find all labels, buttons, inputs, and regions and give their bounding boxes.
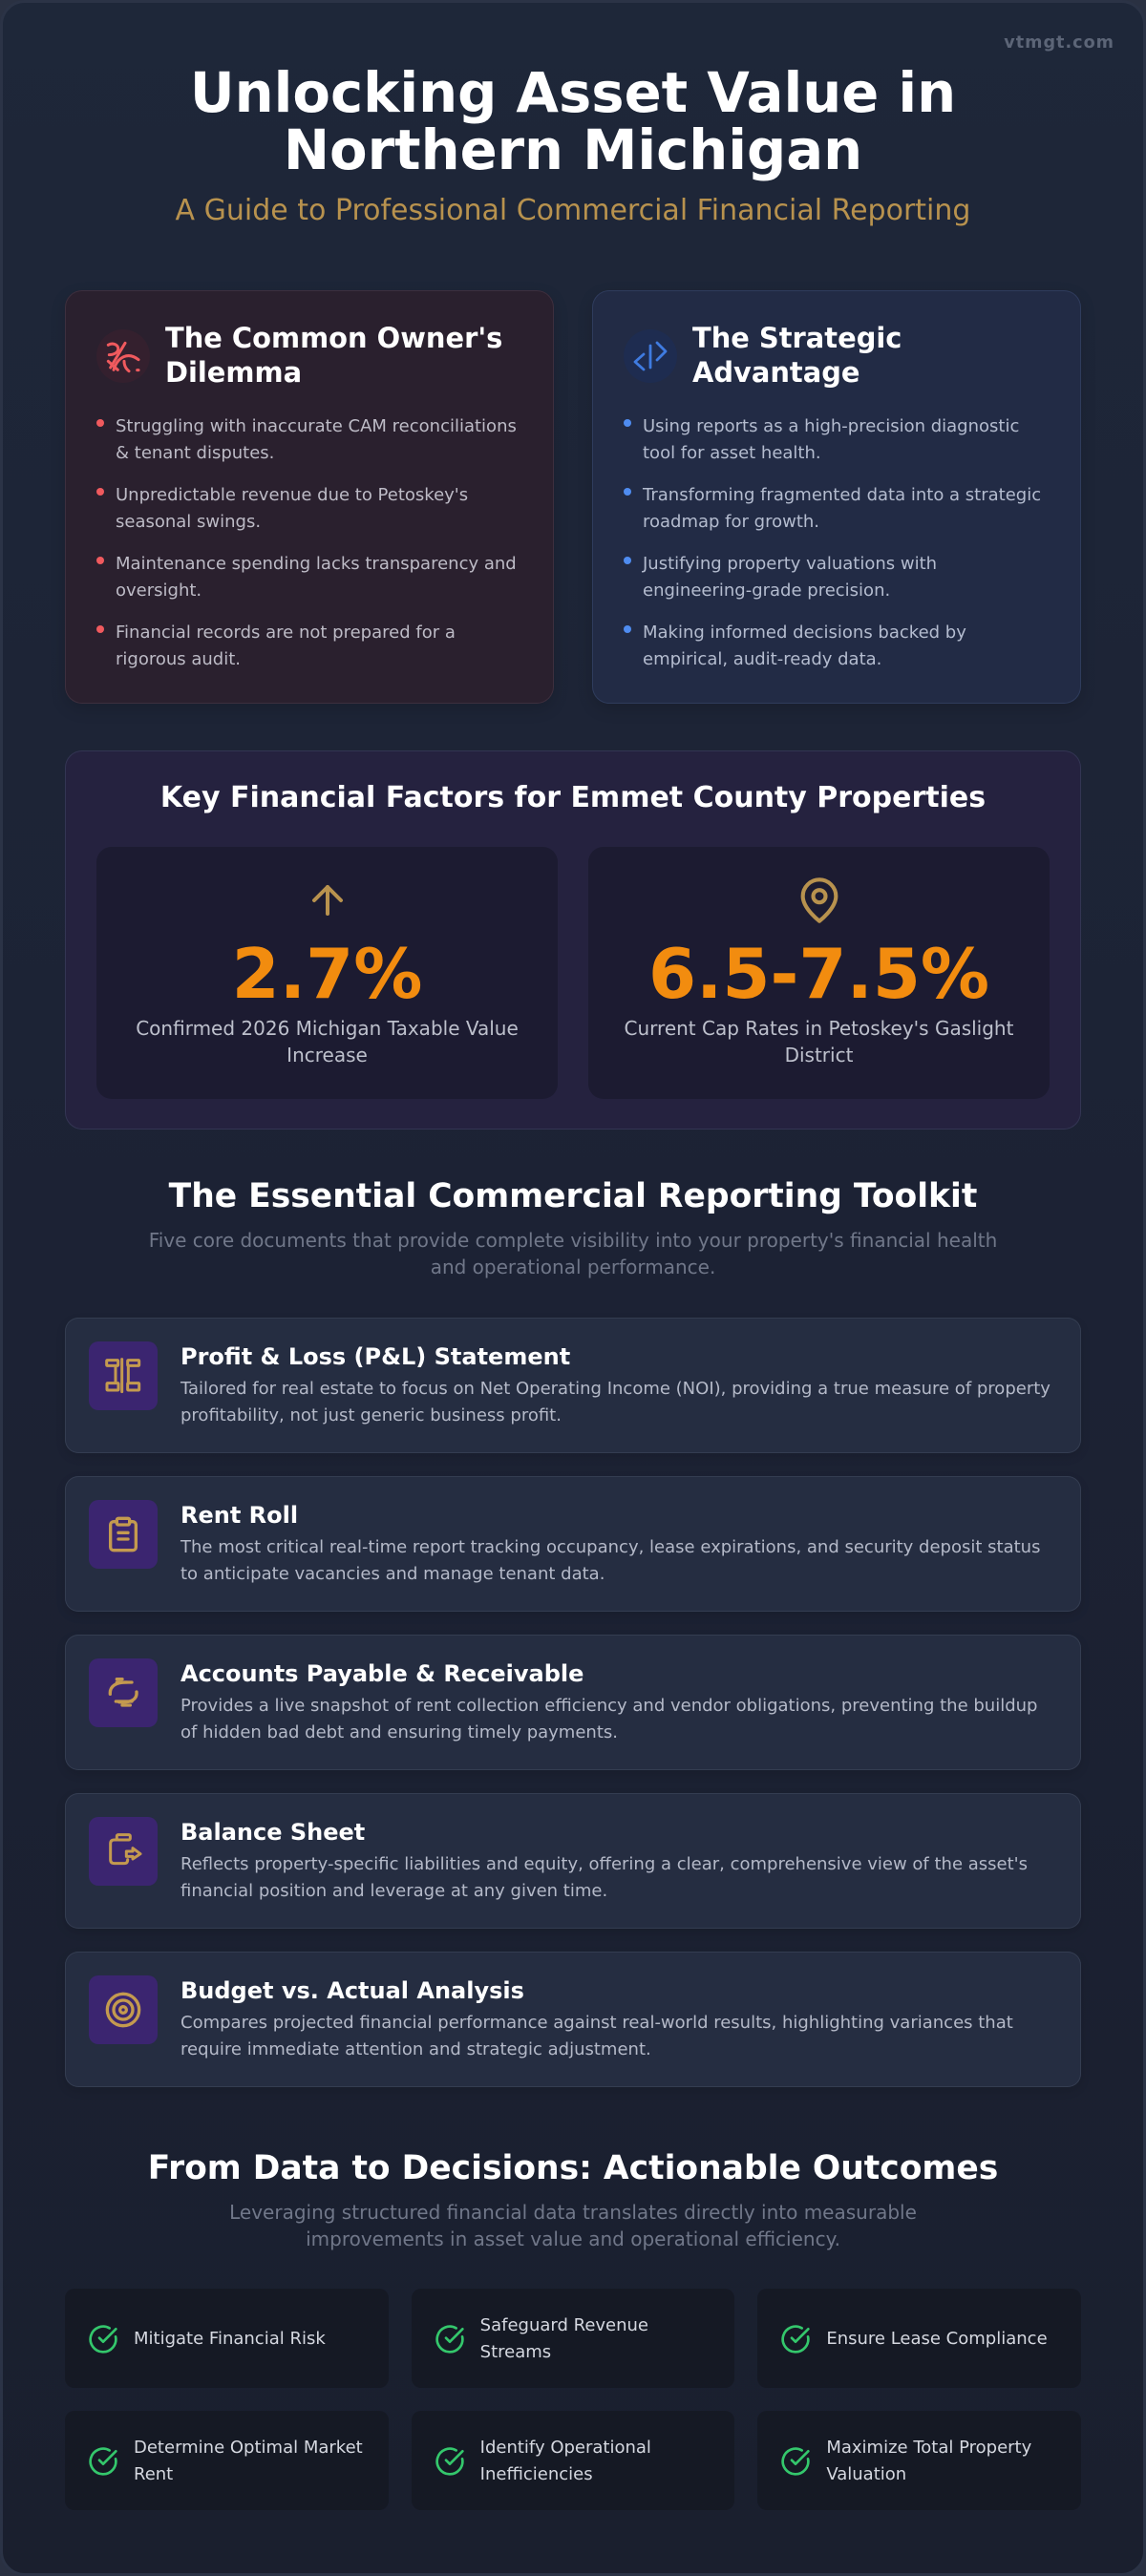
bullet (96, 416, 517, 463)
icon: check (781, 2447, 810, 2476)
outcome tile (412, 2289, 734, 2388)
outcome tile (65, 2411, 389, 2510)
card description: Compares projected financial performance against real-world results, highlighting variances that (180, 2013, 1013, 2033)
card description: financial position and leverage at any given time. (180, 1881, 607, 1901)
heading: The Common Owner's (165, 321, 502, 353)
bullet (96, 554, 517, 601)
card title: Rent Roll (180, 1502, 298, 1529)
icon: check (89, 2325, 117, 2354)
bullet: seasonal swings. (116, 512, 261, 532)
tile text: Identify Operational (480, 2438, 651, 2458)
title: Northern Michigan (284, 118, 862, 182)
bullet: Maintenance spending lacks transparency and (116, 554, 517, 574)
toolkit intro (149, 1228, 997, 1277)
bullet: engineering-grade precision. (643, 581, 890, 601)
stat label: Confirmed 2026 Michigan Taxable Value (136, 1017, 519, 1040)
tile text (480, 2438, 651, 2484)
outcomes intro: Leveraging structured financial data translates directly into measurable (229, 2200, 917, 2223)
heading: Advantage (692, 355, 860, 388)
card description: Reflects property-specific liabilities and equity, offering a clear, comprehensive view of the asset's (180, 1854, 1028, 1874)
heading: Key Financial Factors for Emmet County Properties (160, 781, 986, 814)
bullet: roadmap for growth. (643, 512, 819, 532)
card description (180, 1379, 1050, 1425)
card description: profitability, not just generic business profit. (180, 1405, 562, 1425)
stat label (136, 1017, 519, 1066)
outcome tile (757, 2289, 1081, 2388)
tile text (134, 2438, 363, 2484)
outcome tile (65, 2289, 389, 2388)
icon: wallet arrow (89, 1817, 158, 1886)
stat label: Current Cap Rates in Petoskey's Gaslight (625, 1017, 1013, 1040)
icon: check (89, 2447, 117, 2476)
tile text: Mitigate Financial Risk (134, 2329, 326, 2349)
card description (180, 1696, 1037, 1742)
icon: code (624, 329, 677, 383)
stat label: District (785, 1044, 853, 1066)
bullet: rigorous audit. (116, 649, 241, 669)
bullet (96, 485, 468, 532)
card description: to anticipate vacancies and manage tenant data. (180, 1564, 605, 1584)
bullet: Struggling with inaccurate CAM reconciliations (116, 416, 517, 436)
heading: toolkit: The Essential Commercial Reporting Toolkit (169, 1177, 977, 1215)
bullet: empirical, audit-ready data. (643, 649, 881, 669)
heading: Dilemma (165, 355, 302, 388)
card description: Provides a live snapshot of rent collection efficiency and vendor obligations, preventing the buildup (180, 1696, 1037, 1716)
tile text: Ensure Lease Compliance (826, 2329, 1048, 2349)
card: profit and loss (65, 1318, 1081, 1453)
outcome tile (412, 2411, 734, 2510)
bullet: Using reports as a high-precision diagnostic (643, 416, 1019, 436)
card description (180, 1854, 1028, 1901)
tile text: Inefficiencies (480, 2464, 593, 2484)
title: Unlocking Asset Value in (190, 61, 956, 125)
bullet: Financial records are not prepared for a (116, 623, 456, 643)
outcomes intro: improvements in asset value and operational efficiency. (306, 2227, 840, 2249)
panel: the common owner's dilemma (65, 290, 554, 704)
bullet: Transforming fragmented data into a strategic (643, 485, 1041, 505)
card: rent roll (65, 1476, 1081, 1612)
card description (180, 2013, 1013, 2059)
heading (165, 321, 502, 388)
toolkit intro: and operational performance. (431, 1255, 715, 1277)
bullet (624, 554, 937, 601)
bullet (96, 623, 456, 669)
bullet (624, 623, 966, 669)
icon: cycle arrows (89, 1658, 158, 1727)
card description: Tailored for real estate to focus on Net Operating Income (NOI), providing a true measure of property (180, 1379, 1050, 1399)
outcome tile (757, 2411, 1081, 2510)
stat card: taxable value (96, 847, 558, 1099)
card: balance sheet (65, 1793, 1081, 1929)
card description: of hidden bad debt and ensuring timely payments. (180, 1722, 618, 1742)
tile text: Determine Optimal Market (134, 2438, 363, 2458)
bullet (624, 416, 1019, 463)
subtitle: A Guide to Professional Commercial Financial Reporting (176, 194, 970, 227)
icon: map pin (800, 877, 838, 923)
tile text (826, 2438, 1031, 2484)
card title: Profit & Loss (P&L) Statement (180, 1343, 570, 1370)
icon: check (435, 2447, 464, 2476)
stat card: cap rates (588, 847, 1050, 1099)
card title: Balance Sheet (180, 1819, 365, 1846)
panel: the strategic advantage (592, 290, 1081, 704)
bullet: tool for asset health. (643, 443, 821, 463)
bullet: Unpredictable revenue due to Petoskey's (116, 485, 468, 505)
card description: require immediate attention and strategic adjustment. (180, 2039, 651, 2059)
icon: check (435, 2325, 464, 2354)
tile text: Rent (134, 2464, 173, 2484)
icon: check (781, 2325, 810, 2354)
toolkit intro: Five core documents that provide complete visibility into your property's financial health (149, 1228, 997, 1251)
outcomes intro (229, 2200, 917, 2249)
brand label: vtmgt.com (1004, 33, 1114, 53)
card description (180, 1537, 1040, 1584)
icon: broken link (96, 329, 150, 383)
icon: clipboard (89, 1500, 158, 1569)
icon: arrow up (311, 884, 344, 916)
icon: target (89, 1975, 158, 2044)
tile text: Streams (480, 2342, 551, 2362)
card title: Accounts Payable & Receivable (180, 1660, 584, 1687)
stat label (625, 1017, 1013, 1066)
bullet: oversight. (116, 581, 202, 601)
icon: columns (89, 1341, 158, 1410)
tile text: Valuation (826, 2464, 906, 2484)
bullet (624, 485, 1041, 532)
stat label: Increase (286, 1044, 368, 1066)
tile text: Maximize Total Property (826, 2438, 1031, 2458)
heading: outcomes: From Data to Decisions: Actionable Outcomes (148, 2149, 998, 2187)
heading: The Strategic (692, 321, 902, 353)
bullet: Making informed decisions backed by (643, 623, 966, 643)
card: budget vs actual (65, 1952, 1081, 2087)
bullet: & tenant disputes. (116, 443, 274, 463)
statistic: 2.7% (232, 934, 422, 1014)
card title: Budget vs. Actual Analysis (180, 1977, 524, 2004)
heading (692, 321, 902, 388)
card: accounts payable and receivable (65, 1635, 1081, 1770)
tile text: Safeguard Revenue (480, 2315, 648, 2335)
tile text (480, 2315, 648, 2362)
card description: The most critical real-time report tracking occupancy, lease expirations, and security deposit status (180, 1537, 1040, 1557)
bullet: Justifying property valuations with (643, 554, 937, 574)
title (190, 61, 956, 182)
statistic: 6.5-7.5% (648, 934, 989, 1014)
panel: key financial factors (65, 750, 1081, 1130)
